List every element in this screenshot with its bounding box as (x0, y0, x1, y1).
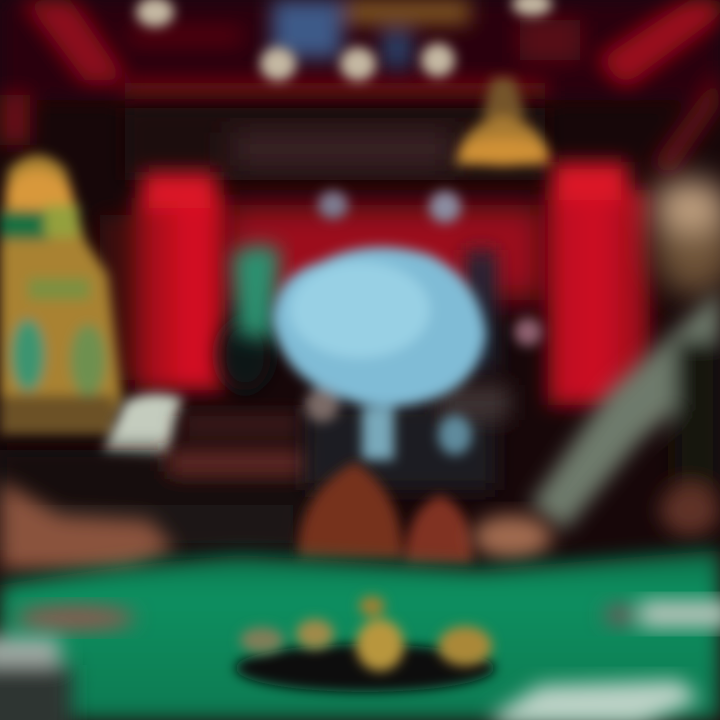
ceiling lights (136, 0, 552, 81)
green figure (232, 245, 280, 340)
left table cards (15, 605, 135, 631)
money bags (298, 462, 472, 565)
green table (0, 550, 720, 720)
bottom white card (490, 680, 700, 720)
person on right: head (652, 179, 720, 295)
bottom left grey object (0, 637, 72, 720)
ceiling mural (272, 0, 470, 68)
dark ceiling band (125, 108, 545, 180)
right table cards (604, 600, 720, 628)
dark figure (219, 250, 510, 490)
chip tray (235, 596, 495, 692)
white object (102, 394, 182, 462)
person on right: arm (530, 290, 720, 536)
dark counter (0, 415, 320, 550)
right hand (472, 515, 552, 559)
chips (240, 596, 492, 671)
back wall (225, 205, 545, 300)
statue (0, 155, 122, 435)
hanging lamp (455, 78, 552, 166)
wall lights (318, 191, 542, 346)
brain blob (272, 247, 486, 460)
right red curtain (548, 162, 650, 405)
left hand (0, 480, 175, 572)
left red curtain (100, 172, 225, 390)
ceiling rafters (0, 0, 720, 175)
